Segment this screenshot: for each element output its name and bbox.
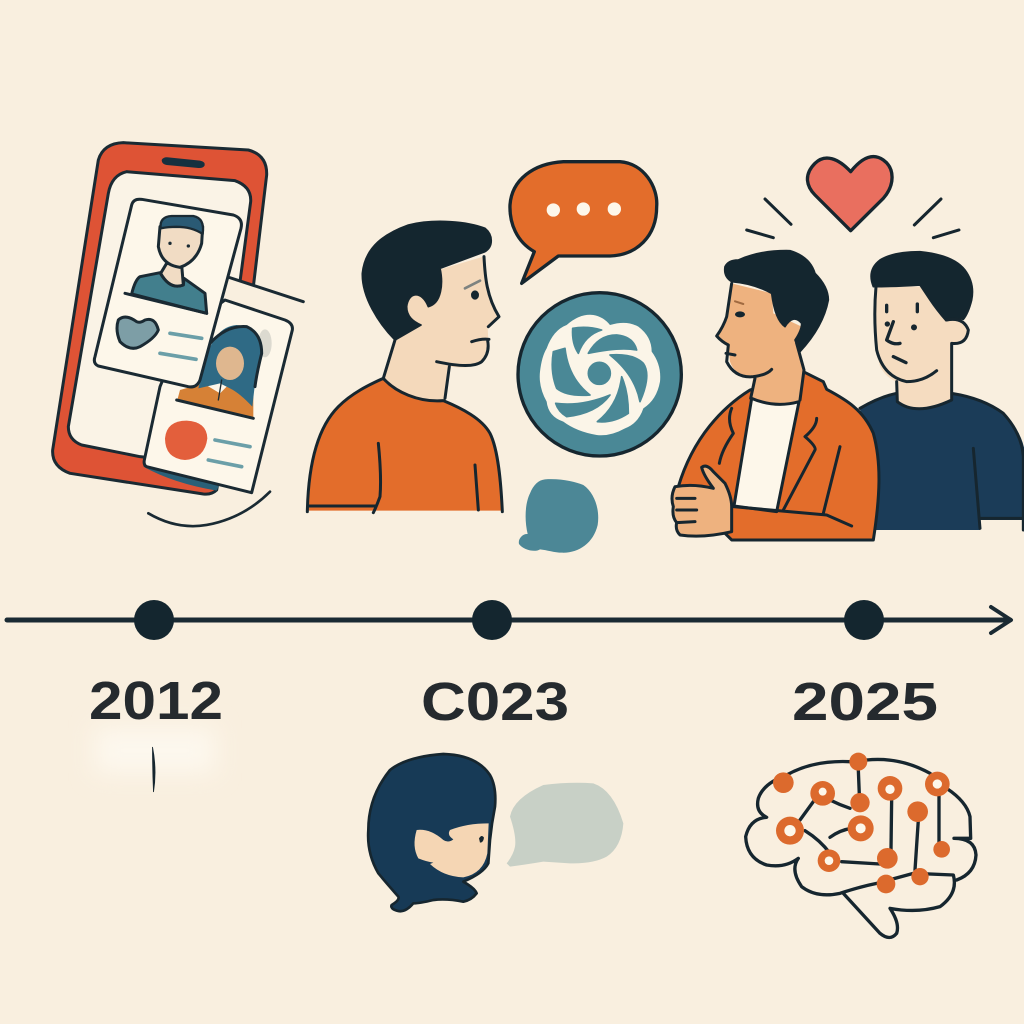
year label 2012: 2012 — [89, 671, 223, 731]
year label 2025: 2025 — [792, 672, 938, 732]
faded patch under 2012 — [95, 728, 215, 773]
year label C023: C023 — [421, 672, 569, 732]
person: man in navy sweater — [860, 252, 1024, 530]
icon: AI swirl logo — [518, 293, 681, 456]
speech bubble: orange with dots — [510, 162, 657, 283]
profile card: man — [94, 199, 241, 387]
decorative love rays — [747, 199, 959, 238]
icon: phone with profile cards — [53, 143, 303, 526]
icon: head with grey speech bubble — [368, 754, 623, 911]
icon: heart — [807, 157, 892, 231]
dark hair head — [368, 754, 495, 911]
profile card: woman — [144, 300, 292, 493]
teal blob speech bubble — [519, 479, 598, 553]
face — [415, 823, 489, 877]
icon: brain with circuit nodes — [746, 753, 976, 937]
timeline marker 2023 — [472, 600, 512, 640]
timeline marker 2025 — [844, 600, 884, 640]
person: man in orange shirt — [307, 221, 502, 513]
timeline axis with arrow — [7, 607, 1011, 633]
grey speech bubble — [507, 783, 623, 867]
tick under 2012 — [152, 747, 155, 792]
timeline marker 2012 — [134, 600, 174, 640]
person: man in orange jacket — [672, 251, 879, 540]
